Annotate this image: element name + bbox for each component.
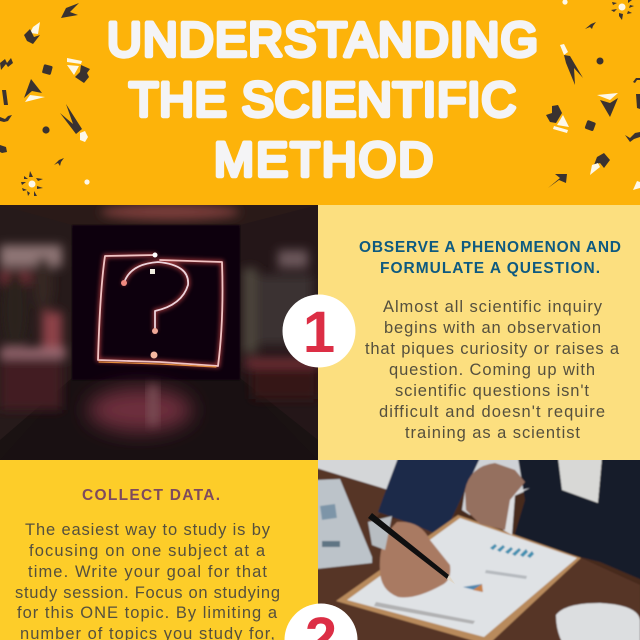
body: step 2: focusing on one subject at a: [29, 542, 266, 560]
floor reflection: [88, 388, 192, 432]
photo: neon question mark in tunnel: [0, 204, 318, 460]
panel: step 2 text: [0, 460, 318, 640]
shirt cuff: [503, 488, 530, 535]
heading: step 1: [359, 239, 621, 277]
body: step 1: [365, 298, 620, 442]
confetti icons: left: [0, 3, 90, 196]
title: [107, 14, 538, 187]
neon sign: [98, 255, 222, 367]
heading: step 2: COLLECT DATA.: [82, 487, 220, 504]
title: UNDERSTANDING: [107, 14, 538, 67]
body: step 2: [15, 521, 280, 640]
body: step 1: that piques curiosity or raises a: [365, 340, 620, 358]
panel: step 1 text: [318, 205, 640, 460]
left wall graffiti: [0, 245, 66, 410]
photo: business person writing on report: [316, 458, 640, 640]
heading: step 1: OBSERVE A PHENOMENON AND: [359, 239, 621, 256]
coffee cup: [556, 603, 640, 640]
confetti icons: right: [546, 0, 640, 190]
chart on report: [374, 544, 534, 624]
writing hand: [380, 522, 450, 598]
right wall graffiti: [243, 250, 317, 399]
navy suit sleeve: [378, 458, 480, 537]
body: step 1: Almost all scientific inquiry: [383, 298, 603, 316]
header banner: [0, 0, 640, 205]
body: step 1: difficult and doesn't require: [379, 403, 605, 421]
badge: number 2: [284, 604, 358, 640]
body: step 2: study session. Focus on studying: [15, 584, 280, 602]
shirt: [462, 458, 528, 515]
body: step 2: time. Write your goal for that: [28, 563, 267, 581]
body: step 1: scientific questions isn't: [395, 382, 589, 400]
pen: [368, 513, 449, 579]
dark suit: [513, 458, 640, 580]
heading: step 1: FORMULATE A QUESTION.: [380, 260, 600, 277]
tunnel back wall: [72, 225, 240, 380]
body: step 1: question. Coming up with: [389, 361, 595, 379]
title: METHOD: [214, 134, 433, 187]
badge: number 1: [282, 294, 356, 368]
fist: [465, 463, 525, 530]
body: step 2: The easiest way to study is by: [25, 521, 271, 539]
clipboard: [336, 515, 581, 640]
body: step 1: begins with an observation: [384, 319, 601, 337]
body: step 1: training as a scientist: [405, 424, 580, 442]
body: step 2: for this ONE topic. By limiting a: [17, 604, 278, 622]
badge: number 1: 1: [303, 300, 335, 365]
title: THE SCIENTIFIC: [129, 74, 516, 127]
